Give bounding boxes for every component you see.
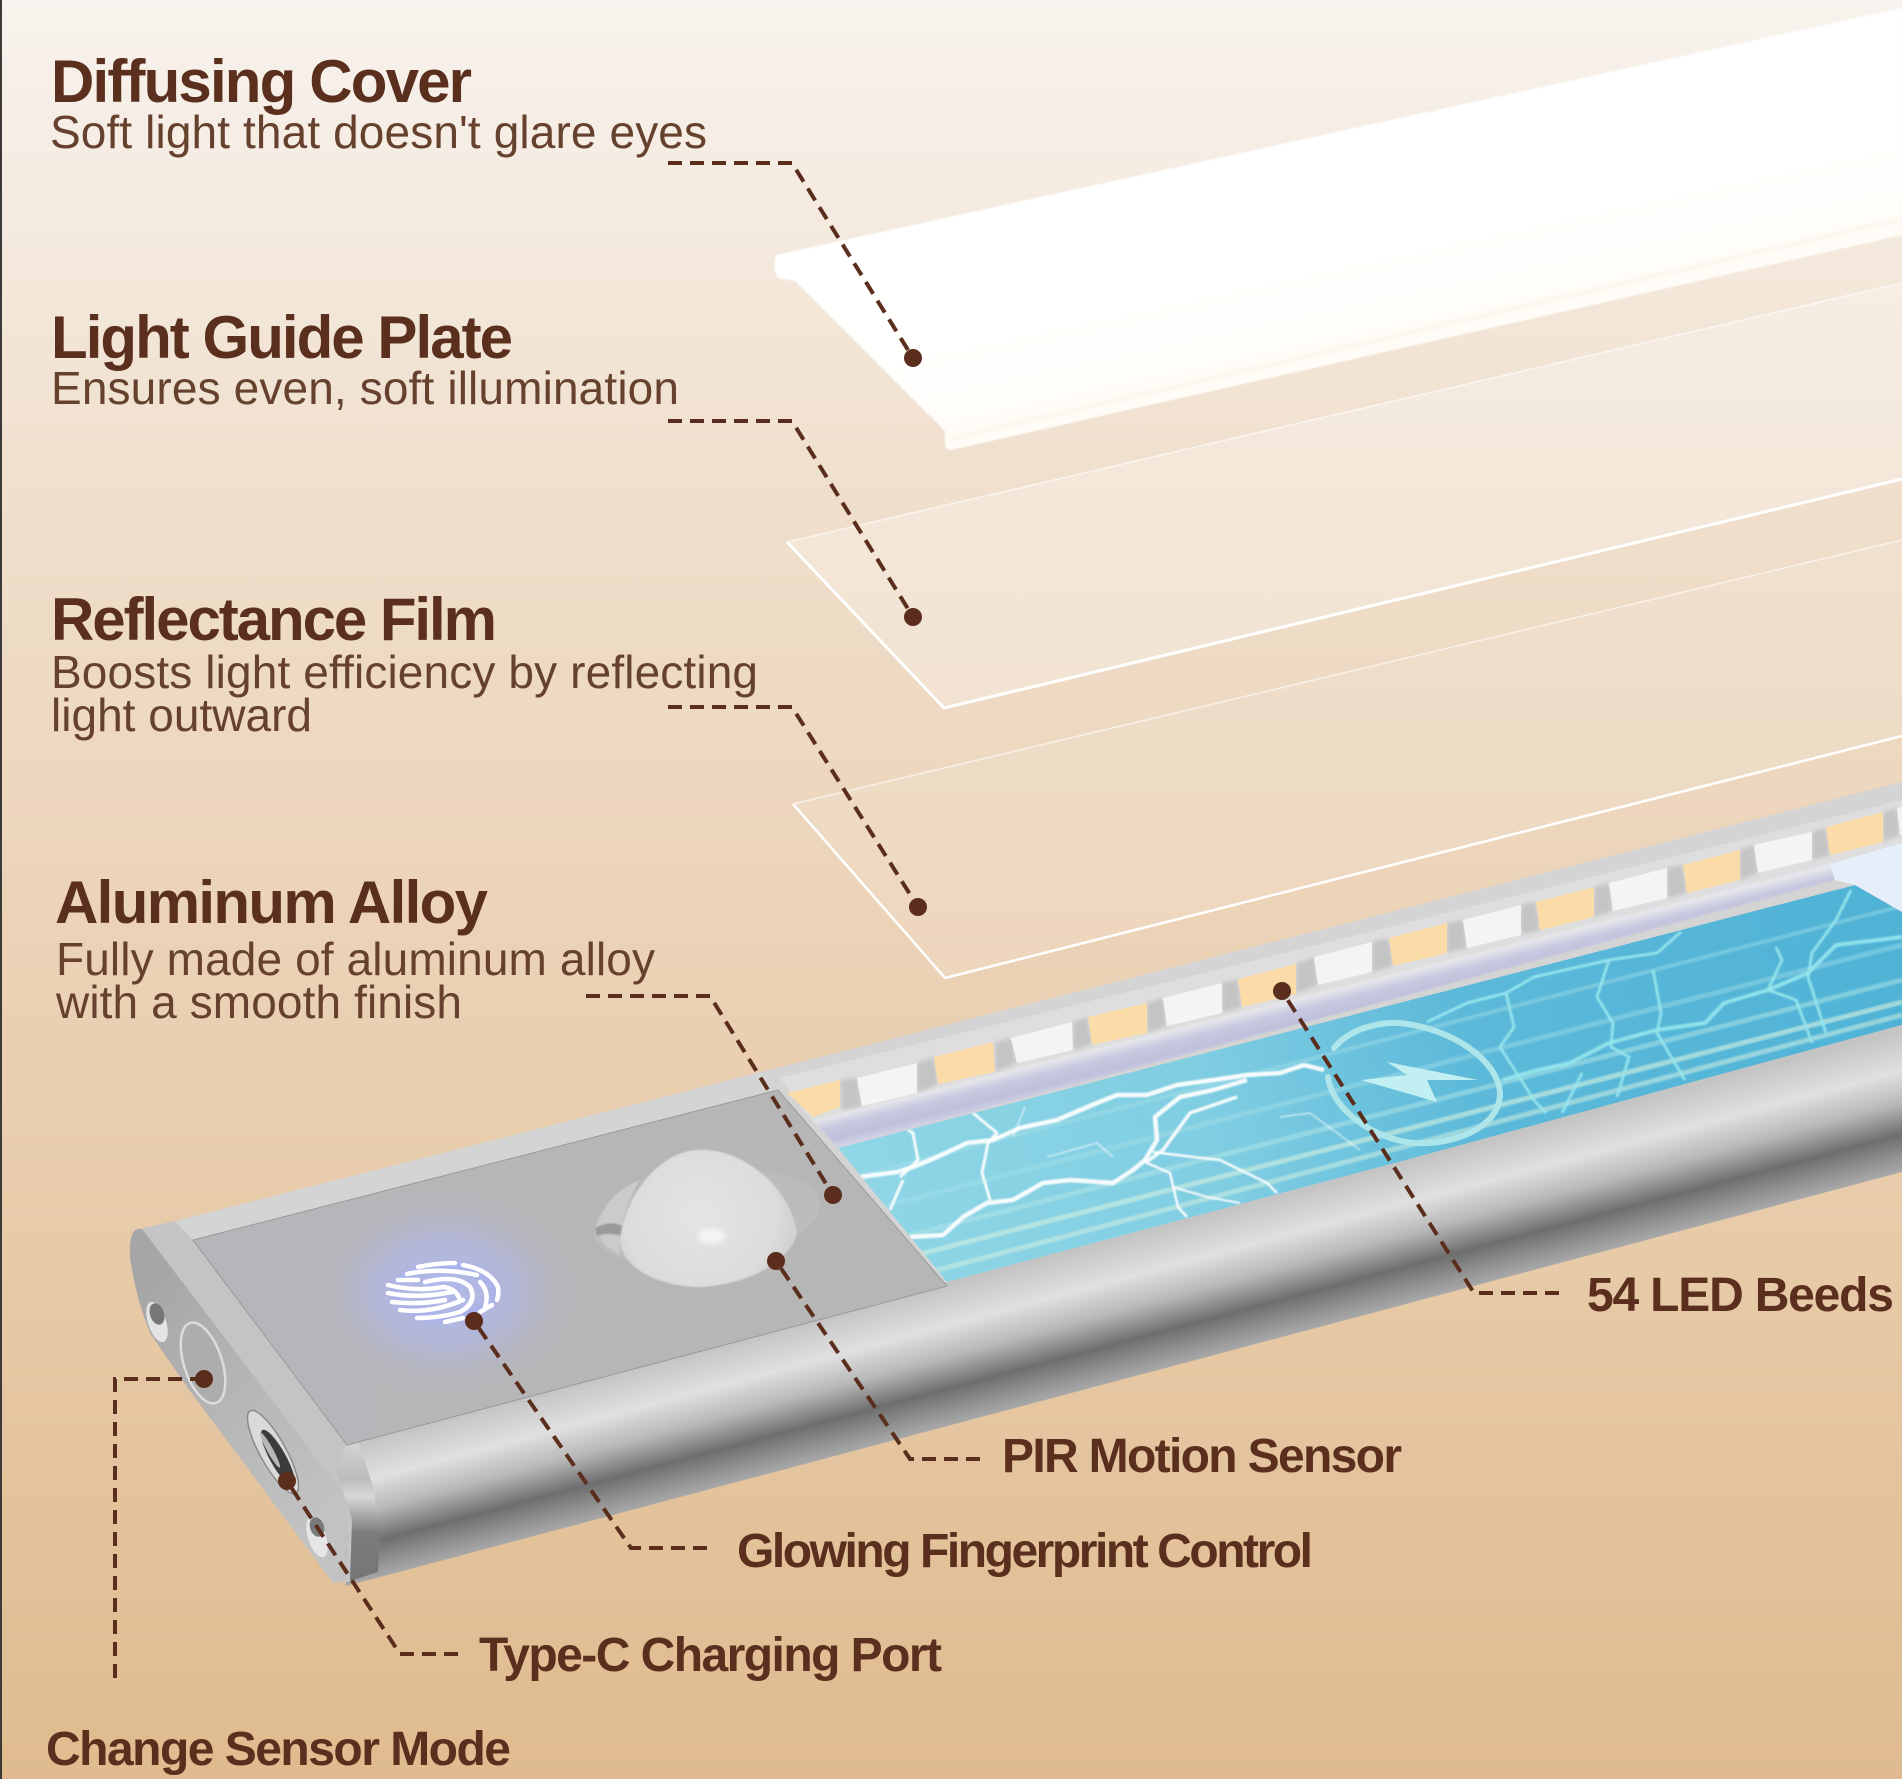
icon: PIR dome sensor [588, 1150, 826, 1287]
lower tube body [346, 1025, 1902, 1586]
text block: Reflectance Film: Boosts light efficiency by reflecting [51, 646, 758, 698]
icon: pinhole [142, 1299, 172, 1345]
icon: mode button [172, 1317, 234, 1409]
LED beads [787, 807, 1902, 1117]
text block: Aluminum Alloy: Fully made of aluminum alloy [56, 933, 655, 985]
text block: Reflectance Film: Reflectance Film [51, 586, 497, 653]
text block: Diffusing Cover: Diffusing Cover [51, 48, 472, 115]
text block: Light Guide Plate [51, 304, 679, 414]
label: PIR Motion Sensor: PIR Motion Sensor [1002, 1430, 1402, 1483]
callout leader lines [115, 163, 1559, 1682]
end cap side face [130, 1229, 347, 1583]
LED gaps [840, 808, 1900, 1110]
text block: Diffusing Cover: Soft light that doesn't glare eyes [50, 106, 707, 158]
label: Change Sensor Mode: Change Sensor Mode [46, 1723, 511, 1776]
panel: diffusing cover layer [774, 8, 1902, 450]
icon: lower pinhole [302, 1514, 332, 1560]
text block: Reflectance Film [51, 586, 758, 741]
lightning: white left side [860, 1065, 1360, 1237]
top rail [175, 782, 1902, 1286]
text block: Diffusing Cover [50, 48, 707, 158]
control panel [193, 1090, 947, 1445]
icon: Type-C port [239, 1405, 307, 1499]
panel: reflectance film layer [793, 540, 1902, 978]
blue charging panel with lightning [838, 885, 1902, 1282]
text block: Aluminum Alloy: with a smooth finish [55, 976, 462, 1028]
panel: aluminium light bar [130, 782, 1902, 1586]
panel: light guide plate layer [787, 283, 1902, 708]
lavender light strip [813, 862, 1835, 1148]
label: Type-C Charging Port: Type-C Charging Port [479, 1629, 942, 1682]
text block: Reflectance Film: light outward [51, 689, 312, 741]
callout dots [195, 349, 1291, 1490]
icon: fingerprint [388, 1263, 498, 1322]
end cap bevel [140, 1221, 365, 1582]
text block: Aluminum Alloy: Aluminum Alloy [55, 869, 489, 936]
text block: Aluminum Alloy [55, 869, 655, 1028]
text block: Light Guide Plate: Ensures even, soft illumination [51, 362, 679, 414]
end ring [335, 1441, 380, 1581]
label: Glowing Fingerprint Control: Glowing Fingerprint Control [737, 1525, 1313, 1578]
LED band [780, 800, 1902, 1122]
fingerprint glow [305, 1187, 585, 1397]
charging icon [1328, 1023, 1500, 1143]
label: 54 LED Beeds: 54 LED Beeds [1587, 1269, 1894, 1322]
text block: Light Guide Plate: Light Guide Plate [51, 304, 513, 371]
lightning: cyan right side [1427, 890, 1902, 1113]
